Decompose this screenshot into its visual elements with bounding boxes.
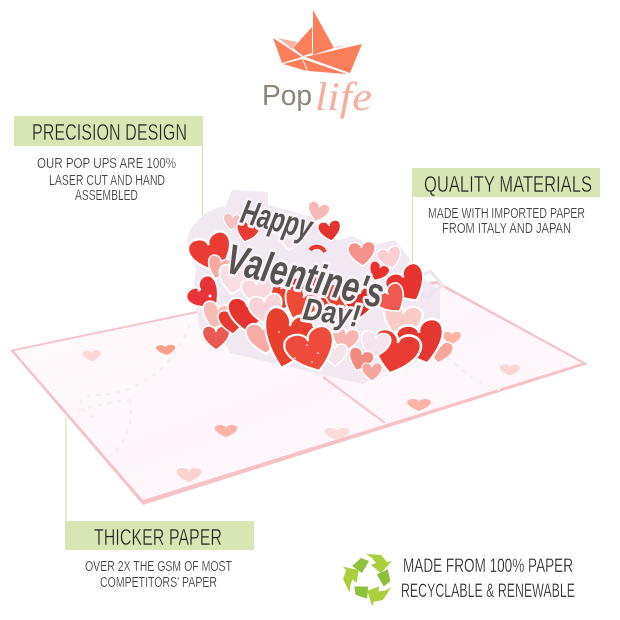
logo wordmark life: life <box>315 74 372 119</box>
heading: PRECISION DESIGN <box>32 119 187 145</box>
Valentine's: Valentine's <box>222 235 388 317</box>
Day!: Day! <box>301 291 362 334</box>
front large red heart <box>198 288 343 379</box>
open pop-up card base <box>10 281 588 505</box>
description: OVER 2X THE GSM OF MOST <box>85 558 232 575</box>
callout line: quality materials <box>412 197 414 268</box>
Happy: Happy <box>237 193 318 248</box>
callout line: thicker paper <box>65 418 67 521</box>
panel: quality materials <box>412 168 600 237</box>
icon: recycling arrows <box>337 554 398 610</box>
white dots on front heart <box>198 288 319 363</box>
description: FROM ITALY AND JAPAN <box>442 220 571 237</box>
heading band <box>14 116 203 146</box>
callout line: precision design <box>202 146 204 226</box>
heading band <box>65 521 254 550</box>
lilac backing and platform <box>187 190 440 384</box>
middle hearts <box>183 229 454 381</box>
logo: Poplife <box>262 10 372 119</box>
heading: THICKER PAPER <box>94 524 222 550</box>
description <box>37 155 176 204</box>
centre fold <box>323 377 385 423</box>
star outline <box>414 271 443 298</box>
card pink edge <box>10 281 588 505</box>
description <box>428 205 585 237</box>
dotted heart trails <box>78 325 500 460</box>
description: LASER CUT AND HAND <box>49 172 165 189</box>
back hearts <box>222 200 404 271</box>
description: COMPETITORS' PAPER <box>100 574 217 591</box>
icon: origami paper boat <box>273 10 362 74</box>
description: OUR POP UPS ARE 100% <box>37 155 176 172</box>
panel: precision design <box>14 116 203 204</box>
recycled paper note <box>337 554 575 610</box>
note text <box>401 556 575 602</box>
printed hearts on card <box>82 332 520 482</box>
description <box>85 558 232 591</box>
heading band <box>412 168 600 197</box>
greeting text <box>222 193 388 334</box>
description: ASSEMBLED <box>75 187 138 204</box>
logo wordmark Pop: Pop <box>262 80 312 112</box>
pop-up heart sculpture <box>183 190 454 384</box>
card inner sheet <box>14 284 582 500</box>
arc red <box>310 247 325 252</box>
panel: thicker paper <box>65 521 254 591</box>
